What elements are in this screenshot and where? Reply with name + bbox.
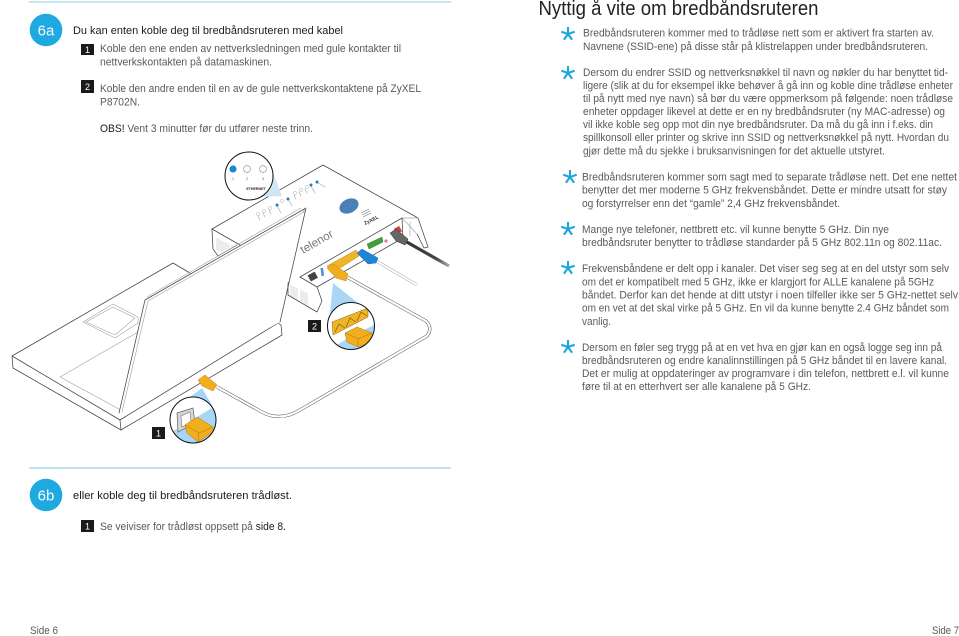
laptop screen: [119, 208, 306, 413]
router yellow plug: [327, 264, 348, 281]
callout label 2: [308, 320, 321, 332]
step 1 marker: 1: [85, 522, 90, 532]
callout: ethernet lights: 1: [232, 177, 234, 181]
tip 5 text: [582, 263, 959, 328]
callout 1: laptop port: [170, 388, 216, 444]
callout 2: router ports: [328, 283, 378, 352]
callout: ethernet lights: ETHERNET: [246, 187, 266, 191]
step 2 marker: [81, 80, 94, 93]
tip 5 text: båndet. Derfor kan det hende at ditt utstyr i noen tilfeller ikke ser 5 GHz-nettet selv: [582, 290, 959, 302]
callout label 2: 2: [312, 322, 317, 332]
yellow cable between laptop and router: [198, 264, 430, 417]
laptop base: [12, 263, 282, 430]
tip 3 text: benytter det mer moderne 5 GHz frekvensbåndet. Dette er mindre utsatt for støy: [582, 185, 948, 197]
asterisk 2: [561, 66, 575, 79]
asterisk 6: [561, 340, 575, 353]
tip 5: [561, 261, 959, 328]
step 1 text: Koble den ene enden av nettverksledningen med gule kontakter til: [100, 43, 401, 55]
callout: ethernet lights: 2: [246, 177, 248, 181]
asterisk 4: [561, 222, 575, 235]
step badge 6a: 6a: [38, 22, 55, 40]
tip 2 text: spillkonsoll eller printer og skrive inn SSID og nettverksnøkkel på nytt. Hvordan du: [583, 132, 949, 144]
tip 3 text: [582, 172, 957, 210]
callout label 1: 1: [156, 428, 161, 438]
OBS note: OBS! Vent 3 minutter før du utfører neste trinn.: [100, 123, 313, 135]
section 6a text block: [73, 25, 421, 135]
laptop trackpad: [83, 304, 138, 338]
laptop yellow plug: [198, 375, 217, 391]
palm rest line: [60, 332, 138, 409]
tip 2: [561, 66, 953, 158]
callout: ethernet lights: 3: [262, 177, 264, 181]
step 2 text: Koble den andre enden til en av de gule nettverkskontaktene på ZyXEL: [100, 83, 421, 95]
step 1 text: nettverkskontakten på datamaskinen.: [100, 56, 272, 68]
tip 2 text: til på nytt med nye navn) så bør du være oppmerksom på følgende: noen trådløse: [583, 93, 953, 105]
blue cable and plug: [357, 249, 417, 285]
step badge 6a: [30, 14, 62, 46]
step 1 marker: 1: [85, 45, 90, 55]
asterisk 3: [563, 170, 577, 183]
step 1 marker: [81, 44, 94, 55]
tip 3 text: Bredbåndsruteren kommer som sagt med to separate trådløse nett. Det ene nettet: [582, 172, 957, 184]
router status lights: [256, 180, 325, 220]
tip 1 text: Navnene (SSID-ene) på disse står på klistrelappen under bredbåndsruteren.: [583, 41, 928, 53]
router side vents: [217, 238, 307, 305]
tip 1: [561, 27, 934, 53]
tip 5 text: om en vet at det skal virke på 5 GHz. En vil da kunne benytte 2.4 GHz båndet som: [582, 303, 949, 315]
tip 6 text: bredbåndsruteren og endre kanalinnstillingen på 5 GHz båndet til en lavere kanal.: [582, 355, 947, 367]
tip 4: [561, 222, 942, 249]
telenor logo: telenor: [298, 228, 336, 257]
step 2 marker: 2: [85, 82, 90, 92]
asterisk 5: [561, 261, 575, 274]
callout: ethernet lights: [225, 152, 282, 200]
heading 6a: Du kan enten koble deg til bredbåndsruteren med kabel: [73, 25, 343, 37]
step 1 text: [100, 43, 401, 68]
tip 4 text: [582, 224, 942, 249]
tip 2 text: Dersom du endrer SSID og nettverksnøkkel til navn og nøkler du har benyttet tid-: [583, 67, 948, 79]
tip 5 text: Frekvensbåndene er delt opp i kanaler. Det viser seg seg at en del utstyr som selv: [582, 263, 950, 275]
router: [212, 165, 428, 312]
tip 2 text: enheter oppdager likevel at dette er en ny bredbåndsruter (ny MAC-adresse) og: [583, 106, 945, 118]
tip 2 text: gjør dette må du sjekke i bruksanvisningen for det aktuelle utstyret.: [583, 146, 885, 158]
step 2 text: [100, 83, 421, 108]
tip 4 text: Mange nye telefoner, nettbrett etc. vil kunne benytte 5 GHz. Din nye: [582, 224, 889, 236]
step 1 marker: [81, 520, 94, 532]
step badge 6b: 6b: [38, 488, 54, 504]
black power cable: [390, 229, 449, 266]
step 1 text: Se veiviser for trådløst oppsett på side 8.: [100, 521, 286, 533]
tip 3 text: og forstyrrelser enn det “gamle” 2,4 GHz frekvensbåndet.: [582, 198, 840, 210]
tip 2 text: vil ikke koble seg opp mot din nye bredbåndsruter. Da må du gå inn i f.eks. din: [583, 119, 933, 131]
section 6b text block: [73, 490, 292, 533]
callout label 1: [152, 427, 165, 439]
step 2 text: P8702N.: [100, 96, 140, 108]
step badge 6b: [30, 479, 62, 511]
tip 1 text: [583, 28, 934, 53]
tip 6 text: [582, 342, 949, 393]
ZyXEL logo: ZyXEL: [363, 215, 380, 227]
tip 5 text: vanlig.: [582, 316, 611, 328]
router back ports: [308, 226, 402, 282]
tip 5 text: om det er kompatibelt med 5 GHz, ikke er klargjort for ALLE kanalene på 5GHz: [582, 276, 934, 288]
tip 1 text: Bredbåndsruteren kommer med to trådløse nett som er aktivert fra starten av.: [583, 28, 934, 40]
tip 6 text: Det er mulig at oppdateringer av programvare i din telefon, nettbrett e.l. vil kunne: [582, 368, 949, 380]
illustration: router and laptop: [12, 152, 449, 448]
asterisk 1: [561, 27, 575, 40]
router power button: [337, 195, 361, 217]
tip 6: [561, 340, 949, 393]
tip 6 text: Dersom en føler seg trygg på at en vet hva en gjør kan en også logge seg inn på: [582, 342, 942, 354]
tips list: [561, 27, 959, 393]
tip 2 text: [583, 67, 953, 158]
tip 6 text: føre til at en etterhvert ser alle kanalene på 5 GHz.: [582, 381, 811, 393]
heading 6b: eller koble deg til bredbåndsruteren trådløst.: [73, 490, 292, 502]
tip 3: [563, 170, 957, 210]
tip 4 text: bredbåndsruter benytter to trådløse standarder på 5 GHz 802.11n og 802.11ac.: [582, 237, 942, 249]
